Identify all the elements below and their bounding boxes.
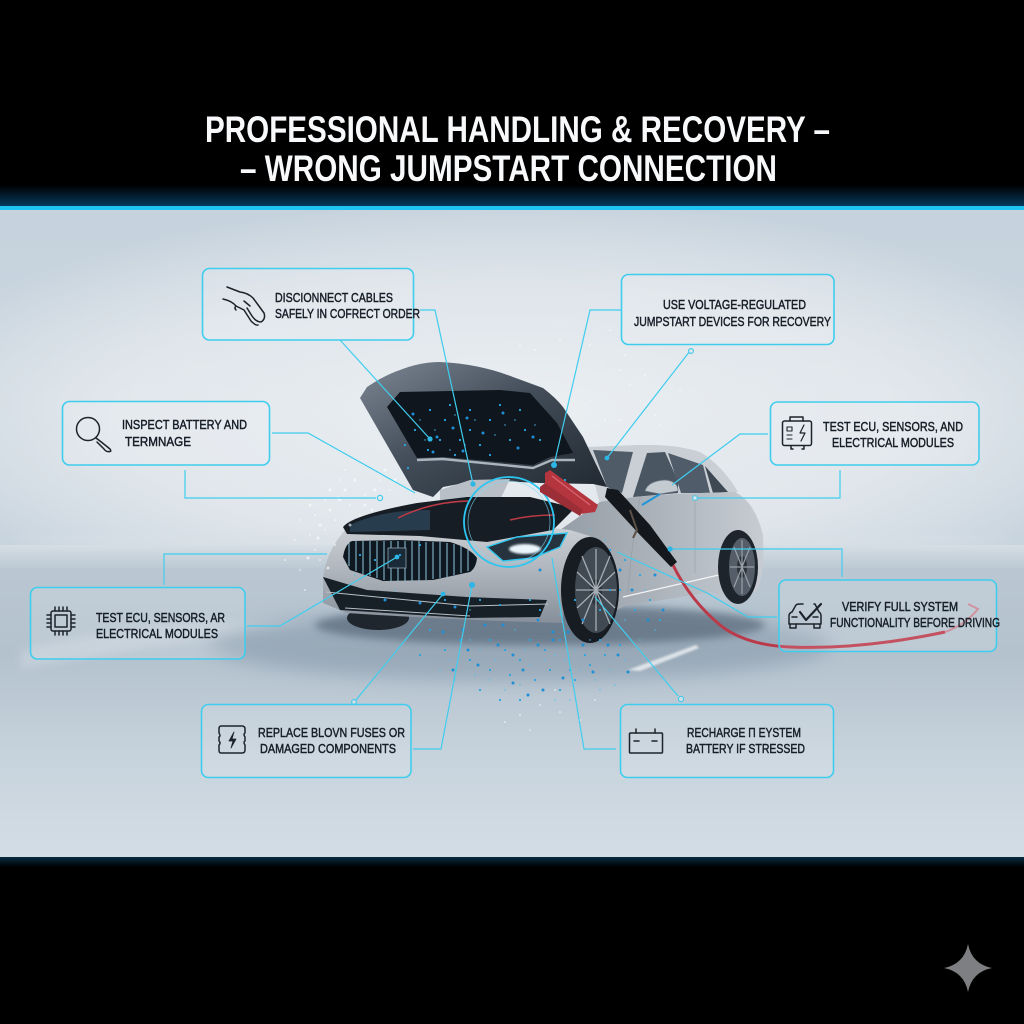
front wheel	[561, 537, 619, 643]
lower intake	[323, 577, 547, 618]
icon: microchip	[47, 607, 75, 635]
callout: verify full system: VERIFY FULL SYSTEM	[842, 599, 958, 614]
callout: voltage regulated devices: JUMPSTART DEVICES FOR RECOVERY	[634, 314, 831, 329]
leader line end dots	[352, 349, 697, 704]
red jumper clamps	[540, 470, 598, 516]
icon: diagnostic case	[782, 417, 812, 449]
callout: disconnect cables	[202, 268, 420, 340]
headlight	[487, 533, 567, 561]
icon: hand with clamp	[223, 287, 265, 325]
callout: test ecu right	[770, 402, 979, 465]
sill highlight	[623, 574, 723, 597]
particle effects	[285, 310, 680, 730]
front body	[323, 518, 590, 623]
callout: test ecu left: TEST ECU, SENSORS, AR	[96, 610, 225, 625]
side windows	[633, 452, 728, 497]
callout: voltage regulated devices: USE VOLTAGE-REGULATED	[663, 297, 806, 312]
open hood	[360, 362, 607, 497]
title: – WRONG JUMPSTART CONNECTION	[240, 147, 777, 189]
header band	[0, 185, 1024, 210]
callout: voltage regulated devices	[622, 274, 834, 344]
callout: disconnect cables: DISCIONNECT CABLES	[275, 290, 393, 305]
callout: inspect battery: TERMNAGE	[125, 434, 191, 449]
icon: battery	[630, 729, 662, 753]
title: PROFESSIONAL HANDLING & RECOVERY –	[205, 108, 830, 150]
callout: inspect battery: INSPECT BATTERY AND	[122, 417, 247, 432]
scene background	[0, 209, 1024, 857]
diagnostic ring	[464, 477, 554, 567]
engine bay	[343, 497, 575, 542]
callout: test ecu left: ELECTRICAL MODULES	[96, 626, 218, 641]
door seams	[628, 495, 695, 592]
callout: replace fuses	[202, 704, 411, 778]
road marking	[628, 645, 699, 671]
red cable	[673, 565, 945, 647]
hood shut line panel	[440, 479, 510, 500]
callout: test ecu right: TEST ECU, SENSORS, AND	[823, 419, 963, 434]
mirror	[645, 480, 678, 494]
title	[205, 108, 830, 189]
callout: replace fuses: DAMAGED COMPONENTS	[260, 741, 396, 756]
front left tyre	[347, 606, 409, 630]
callout: inspect battery	[62, 402, 270, 465]
callout: verify full system	[779, 580, 1000, 652]
footer band	[0, 857, 1024, 1024]
icon: car with check mark	[789, 604, 821, 628]
clamp handle	[605, 488, 677, 567]
body side	[560, 492, 763, 615]
callout: replace fuses: REPLACE BLOVN FUSES OR	[258, 725, 405, 740]
car illustration	[315, 362, 978, 671]
callout: test ecu left	[30, 588, 245, 659]
callout: recharge battery	[620, 704, 834, 778]
icon: magnifier	[76, 418, 111, 452]
callout: disconnect cables: SAFELY IN COFRECT ORDER	[275, 306, 420, 321]
icon: fuse with lightning bolt	[219, 726, 245, 753]
rear wheel	[718, 530, 758, 604]
grille	[343, 540, 477, 581]
windscreen	[593, 450, 633, 493]
callout: test ecu right: ELECTRICAL MODULES	[832, 435, 954, 450]
sparkle watermark	[944, 944, 992, 992]
engine wires	[398, 501, 555, 520]
ground shadow	[315, 605, 765, 645]
callout: recharge battery: RECHARGE Π EYSTEM	[687, 725, 801, 740]
callout: recharge battery: BATTERY IF STRESSED	[686, 741, 805, 756]
cabin roof	[586, 445, 738, 505]
leader lines	[164, 310, 842, 749]
